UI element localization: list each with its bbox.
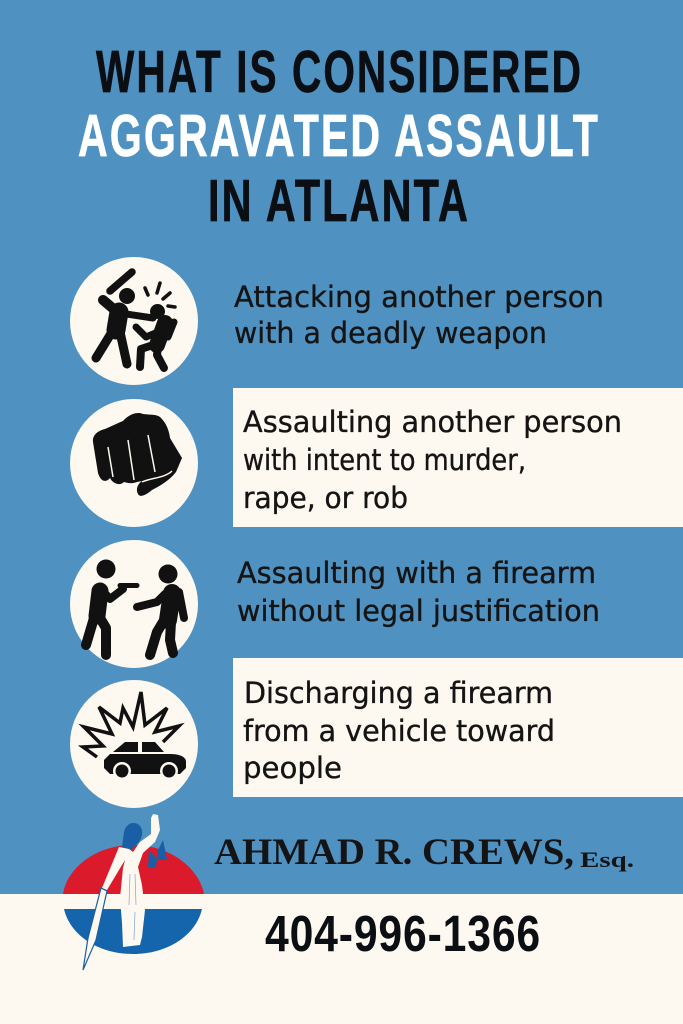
panel: item 2 background xyxy=(233,388,683,527)
item 4 text: people xyxy=(243,751,342,785)
item 1 text: Attacking another person xyxy=(234,280,604,314)
item 3 text xyxy=(237,556,600,628)
item 4 text xyxy=(243,676,555,785)
attorney name: AHMAD R. CREWS, xyxy=(214,832,574,873)
item 2 text: Assaulting another person xyxy=(243,405,622,439)
item 3 text: Assaulting with a firearm xyxy=(237,556,596,590)
item 4 text: from a vehicle toward xyxy=(243,714,555,748)
icon: person pointing gun at another person xyxy=(70,540,198,668)
icon: clenched fist xyxy=(70,399,198,527)
panel: item 4 background xyxy=(233,658,683,797)
icon: explosion over a car xyxy=(70,680,198,808)
footer band xyxy=(0,894,683,1024)
title: IN ATLANTA xyxy=(208,168,470,234)
item 2 text: rape, or rob xyxy=(243,481,408,515)
item 2 text xyxy=(243,405,622,515)
attorney name: Esq. xyxy=(580,847,634,872)
title xyxy=(78,39,600,234)
item 2 text: with intent to murder, xyxy=(243,443,526,477)
item 1 text xyxy=(234,280,604,350)
icon: attacker with bat striking a person xyxy=(70,257,198,385)
logo: lady justice over red and blue oval xyxy=(63,814,204,970)
item 3 text: without legal justification xyxy=(237,594,600,628)
item 1 text: with a deadly weapon xyxy=(234,316,547,350)
phone number: 404-996-1366 xyxy=(265,905,541,962)
item 4 text: Discharging a firearm xyxy=(244,676,553,710)
